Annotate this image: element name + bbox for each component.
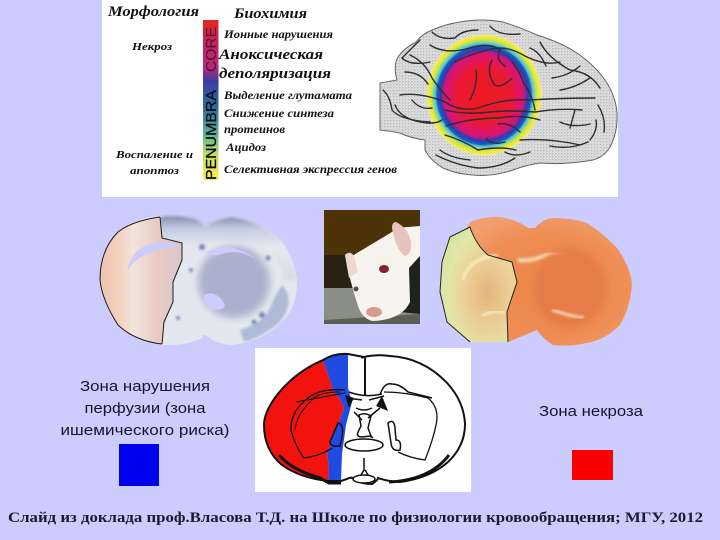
label: necrosis zone: Зона некроза — [539, 403, 644, 420]
text: inflammation and apoptosis: апоптоз — [130, 165, 180, 177]
text: necrosis: Некроз — [131, 41, 173, 53]
list: biochemical processes: деполяризация — [219, 66, 331, 82]
label: perfusion deficit zone — [60, 378, 230, 439]
brain section: blue stained, perfusion deficit outlined — [100, 216, 297, 345]
brain illustration with ischemic zones — [380, 20, 617, 175]
list: biochemical processes — [218, 29, 397, 176]
label: perfusion deficit zone: ишемического риска) — [60, 422, 230, 439]
color scale bar: core and penumbra: PENUMBRA — [203, 90, 220, 180]
infarct region — [100, 217, 182, 344]
necrosis boundary — [440, 227, 517, 342]
text: inflammation and apoptosis — [115, 149, 193, 177]
schematic outlines — [264, 354, 465, 484]
list: biochemical processes: Аноксическая — [218, 47, 323, 63]
legend swatch: red — [572, 450, 613, 480]
panel: brain atlas schematic — [255, 348, 471, 492]
ventricles — [127, 242, 178, 272]
photo: white laboratory rat — [324, 210, 420, 324]
brain section: TTC stained, necrosis outlined — [440, 217, 632, 346]
pale necrotic region — [440, 227, 517, 342]
list: biochemical processes: Выделение глутамата — [223, 90, 352, 102]
heading: morphology: Морфология — [107, 4, 199, 20]
label: perfusion deficit zone: Зона нарушения — [80, 378, 210, 395]
list: biochemical processes: Селективная экспрессия генов — [224, 164, 397, 176]
text: inflammation and apoptosis: Воспаление и — [115, 149, 193, 161]
list: biochemical processes: Снижение синтеза — [224, 108, 334, 120]
legend swatch: blue — [119, 444, 159, 486]
panel: morphology and biochemistry with brain diagram — [102, 0, 618, 197]
heading: biochemistry: Биохимия — [233, 6, 307, 22]
list: biochemical processes: Ионные нарушения — [223, 29, 333, 41]
blue ischemic risk zone — [323, 354, 352, 481]
color scale bar: core and penumbra: CORE — [203, 27, 220, 72]
list: biochemical processes: протеинов — [224, 124, 285, 136]
color scale bar: core and penumbra — [203, 20, 220, 180]
red necrosis zone — [264, 360, 344, 481]
list: biochemical processes: Ацидоз — [225, 142, 267, 154]
label: perfusion deficit zone: перфузии (зона — [84, 400, 206, 417]
footer: source note: Слайд из доклада проф.Власова Т.Д. на Школе по физиологии кровообращения; МГУ, 2012 — [8, 510, 703, 526]
